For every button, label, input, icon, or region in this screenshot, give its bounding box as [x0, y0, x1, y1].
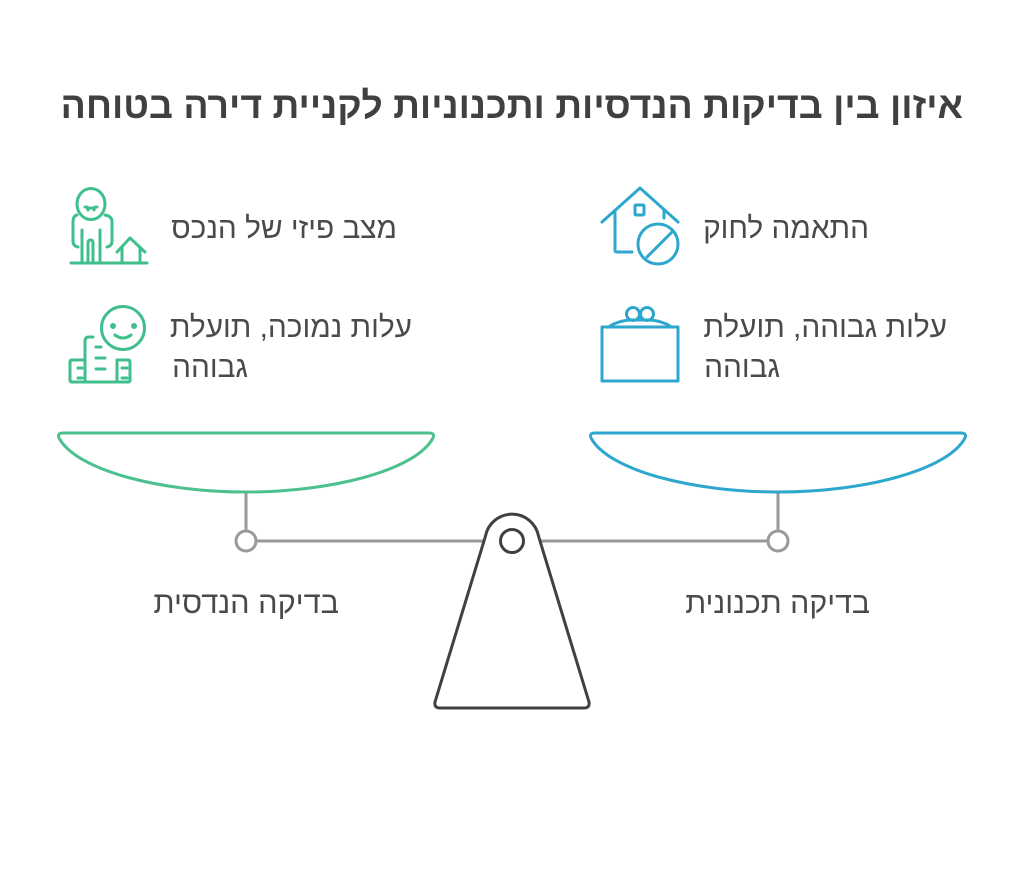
label: physical condition: מצב פיזי של הנכס [171, 212, 397, 245]
label: engineering inspection: בדיקה הנדסית [153, 585, 339, 620]
label: low cost high benefit: גבוהה [172, 351, 248, 384]
icon: box with coins [602, 308, 678, 381]
beam of scale [236, 490, 788, 551]
label: low cost high benefit [170, 311, 412, 384]
label: high cost high benefit [703, 311, 947, 384]
left pan [58, 433, 434, 492]
label: low cost high benefit: עלות נמוכה, תועלת [170, 311, 412, 344]
fulcrum [435, 514, 589, 708]
label: high cost high benefit: עלות גבוהה, תועלת [703, 311, 947, 344]
icon: house with prohibition sign [602, 188, 678, 264]
label: legal compliance: התאמה לחוק [703, 212, 869, 245]
label: high cost high benefit: גבוהה [704, 351, 780, 384]
title: איזון בין בדיקות הנדסיות ותכנוניות לקניית דירה בטוחה [61, 84, 963, 126]
icon: person with house [71, 188, 147, 263]
right pan [590, 433, 966, 492]
label: planning inspection: בדיקה תכנונית [685, 587, 870, 620]
icon: smiling face with buildings [70, 306, 144, 382]
